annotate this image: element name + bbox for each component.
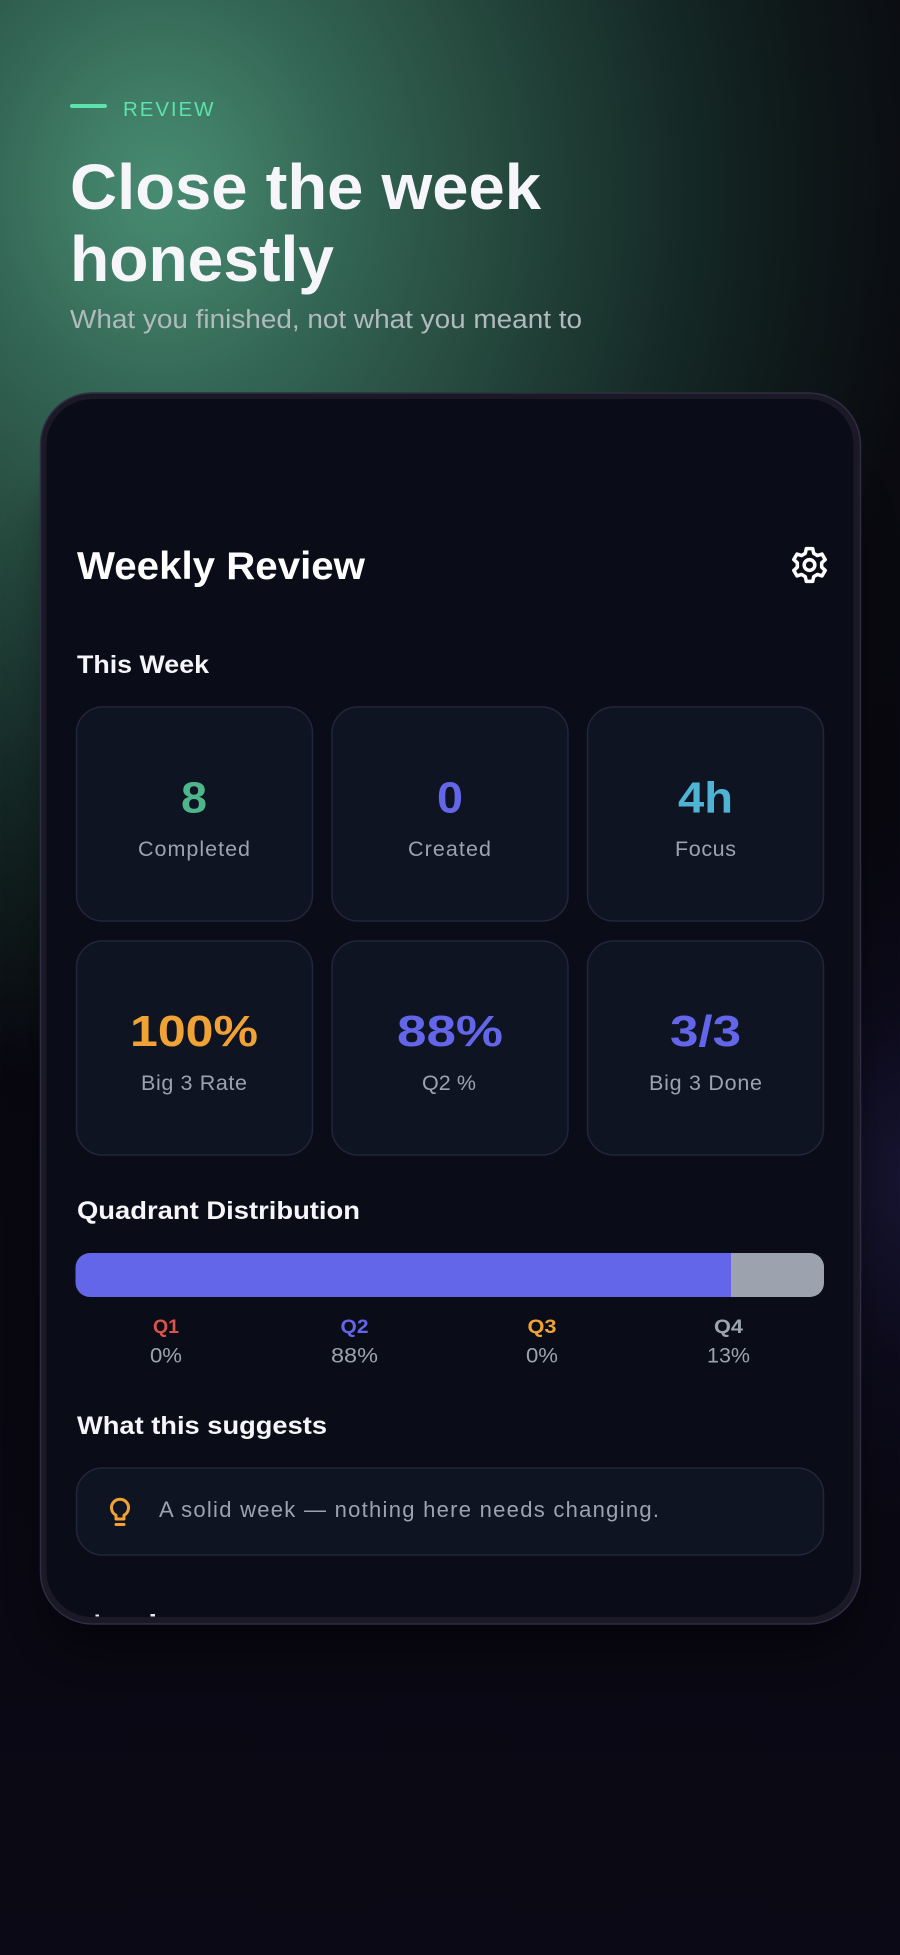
title: Close the week bbox=[70, 151, 541, 223]
stat card: Big 3 Rate bbox=[76, 941, 312, 1155]
stat card: Focus: Focus bbox=[675, 837, 736, 861]
chart: quadrant stacked bar bbox=[76, 1253, 824, 1297]
title: honestly bbox=[70, 223, 334, 295]
callout: suggestion bbox=[76, 1468, 824, 1555]
screen header: Weekly Review: Weekly Review bbox=[77, 545, 366, 588]
stat card: Completed: Completed bbox=[138, 837, 250, 861]
header block bbox=[70, 98, 582, 334]
legend: Q4 bbox=[707, 1316, 750, 1368]
eyebrow: accent dash and label bbox=[70, 98, 214, 121]
legend: Q1: 0% bbox=[150, 1344, 182, 1368]
legend: Q2: 88% bbox=[331, 1344, 378, 1368]
stat card: Completed bbox=[76, 707, 312, 921]
heading: Quadrant Distribution: Quadrant Distribution bbox=[77, 1197, 360, 1225]
stat card: Q2 %: Q2 % bbox=[422, 1071, 476, 1095]
icon: settings gear bbox=[794, 549, 825, 581]
legend: Q1 bbox=[150, 1316, 182, 1368]
eyebrow: accent dash and label: REVIEW bbox=[123, 98, 214, 121]
subtitle: What you finished, not what you meant to bbox=[70, 306, 582, 334]
legend: Q2 bbox=[331, 1316, 378, 1368]
clipped next-section heading tips bbox=[96, 1614, 155, 1616]
panel: device frame bbox=[40, 393, 860, 1624]
legend: Q3: 0% bbox=[526, 1344, 558, 1368]
legend: Q1: Q1 bbox=[153, 1316, 179, 1338]
legend: Q3: Q3 bbox=[528, 1316, 557, 1338]
device shadow bbox=[44, 480, 857, 1650]
stat card: Focus: 4h bbox=[678, 774, 733, 822]
stat card: Focus bbox=[588, 707, 824, 921]
stat card: Created bbox=[332, 707, 568, 921]
stat card: Big 3 Rate: Big 3 Rate bbox=[141, 1071, 247, 1095]
stat card: Big 3 Done bbox=[588, 941, 824, 1155]
stat card: Completed: 8 bbox=[181, 774, 207, 822]
stat card: Created: Created bbox=[408, 837, 491, 861]
stat card: Big 3 Rate: 100% bbox=[130, 1007, 258, 1056]
stat card: Big 3 Done: Big 3 Done bbox=[649, 1071, 762, 1095]
stat card: Q2 %: 88% bbox=[397, 1007, 503, 1056]
legend: Q4: 13% bbox=[707, 1344, 750, 1368]
legend: Q3 bbox=[526, 1316, 558, 1368]
stat card: Q2 % bbox=[332, 941, 568, 1155]
heading: What this suggests: What this suggests bbox=[77, 1412, 327, 1440]
callout: suggestion: A solid week — nothing here needs changing. bbox=[159, 1497, 659, 1522]
heading: This Week: This Week bbox=[77, 651, 209, 679]
stat card: Created: 0 bbox=[437, 774, 463, 822]
legend: Q2: Q2 bbox=[340, 1316, 369, 1338]
stat card: Big 3 Done: 3/3 bbox=[670, 1007, 741, 1056]
icon: light bulb bbox=[112, 1499, 128, 1524]
legend: Q4: Q4 bbox=[714, 1316, 743, 1338]
